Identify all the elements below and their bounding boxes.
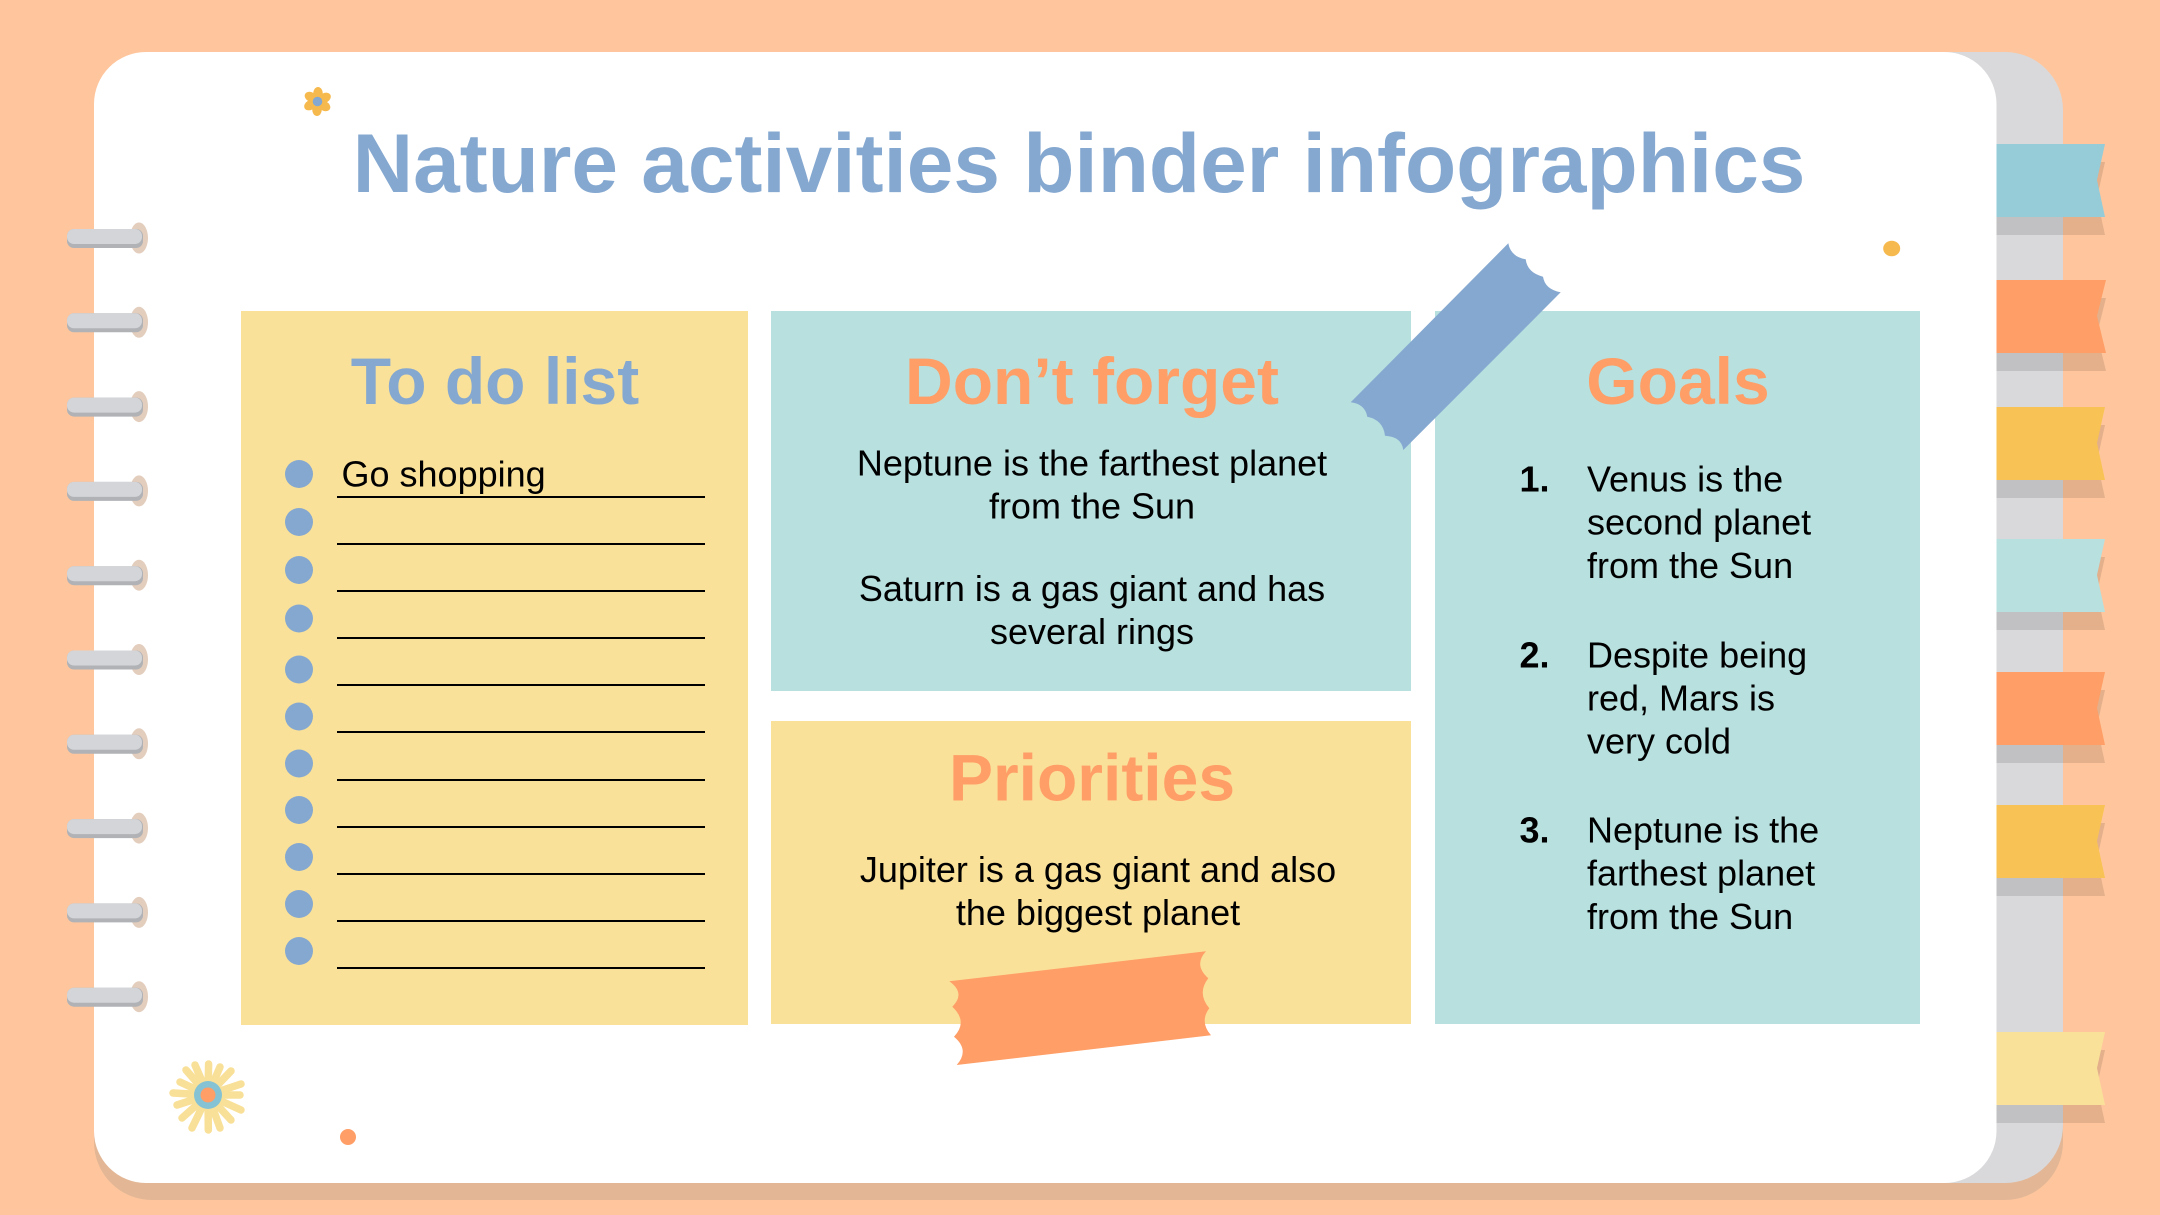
spiral rings <box>67 222 148 1012</box>
text: saturn: Saturn is a gas giant and has <box>859 568 1325 609</box>
goal 3 <box>1520 810 1819 937</box>
goal 3: farthest planet <box>1587 852 1815 894</box>
goal 1 <box>1520 458 1811 586</box>
goal 1: Venus is the <box>1587 458 1783 500</box>
text: jupiter: the biggest planet <box>956 892 1240 933</box>
ring 1 <box>67 222 148 254</box>
title: Nature activities binder infographics <box>353 116 1805 210</box>
panel background <box>1435 311 1920 1024</box>
list item text: Go shopping <box>342 454 546 494</box>
goal 2: red, Mars is <box>1587 678 1775 718</box>
decorative dot: amber <box>1883 241 1900 256</box>
panel: goals <box>1435 311 1920 1024</box>
heading: don't forget: Don’t forget <box>905 344 1279 418</box>
bullets <box>285 460 313 965</box>
ring 9 <box>67 897 148 928</box>
panel background <box>241 311 748 1025</box>
goal 2: very cold <box>1587 720 1731 762</box>
tape: blue <box>1351 243 1561 450</box>
icon: sun flower <box>173 1064 241 1130</box>
ring 6 <box>67 644 148 675</box>
tab: pale yellow <box>1996 1032 2105 1123</box>
panel: don't forget <box>771 311 1411 691</box>
heading: to do list: To do list <box>351 344 639 418</box>
panel background <box>771 721 1411 1024</box>
text: saturn: several rings <box>990 611 1194 652</box>
tab: blue <box>1996 144 2105 235</box>
goal 1: from the Sun <box>1587 545 1793 586</box>
goal 2: Despite being <box>1587 634 1807 676</box>
ring 8 <box>67 813 148 844</box>
ring 7 <box>67 728 148 759</box>
tab: orange <box>1996 280 2106 371</box>
tab: pale teal <box>1996 539 2105 630</box>
goal 3: from the Sun <box>1587 896 1793 937</box>
tab: orange <box>1996 672 2105 763</box>
tape: orange <box>949 951 1211 1065</box>
writing lines <box>337 497 705 968</box>
ring 10 <box>67 981 148 1012</box>
heading: priorities: Priorities <box>949 740 1235 814</box>
goal 3: 3. <box>1520 810 1550 850</box>
heading: goals: Goals <box>1586 344 1770 418</box>
tab: amber <box>1996 805 2105 896</box>
text: jupiter: Jupiter is a gas giant and also <box>860 849 1336 890</box>
icon: small flower <box>302 87 333 116</box>
panel: priorities <box>771 721 1411 1024</box>
goal 2 <box>1520 634 1807 762</box>
ring 3 <box>67 391 148 422</box>
decorative dot: orange <box>340 1129 356 1145</box>
index tabs <box>1996 144 2106 1123</box>
text: neptune: from the Sun <box>989 486 1195 526</box>
ring 4 <box>67 475 148 506</box>
panel: to do list <box>241 311 748 1025</box>
tab: amber <box>1996 407 2105 498</box>
goal 3: Neptune is the <box>1587 810 1819 850</box>
ring 5 <box>67 560 148 591</box>
goal 1: 1. <box>1520 458 1550 500</box>
text: neptune: Neptune is the farthest planet <box>857 442 1327 484</box>
panel background <box>771 311 1411 691</box>
goal 1: second planet <box>1587 502 1811 542</box>
ring 2 <box>67 307 148 338</box>
goal 2: 2. <box>1520 634 1550 676</box>
